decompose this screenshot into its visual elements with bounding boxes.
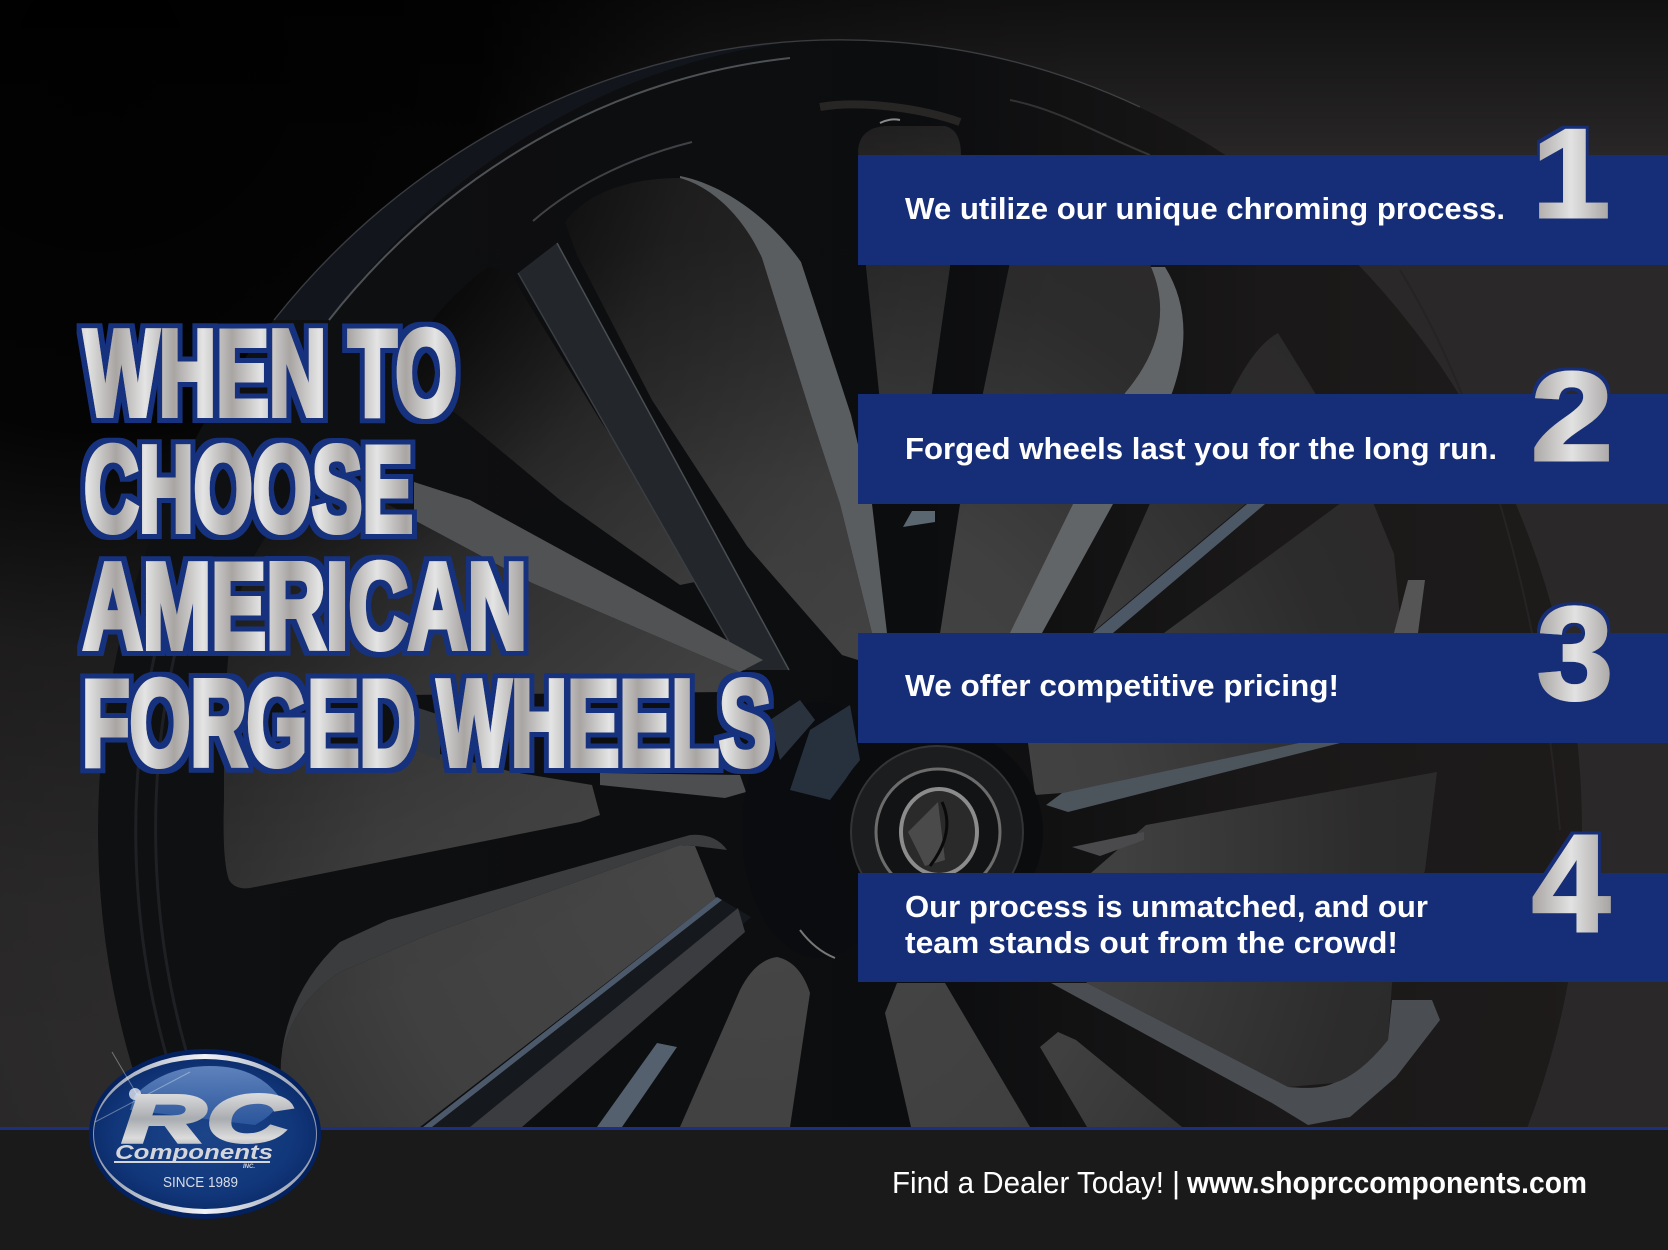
- number 2: 2: [1531, 346, 1613, 487]
- logo Components wordmark: Components: [115, 1142, 273, 1164]
- spike: right of hub: [1072, 832, 1144, 856]
- footer call to action: Find a Dealer Today!: [892, 1165, 1164, 1200]
- panel: reason 3: [858, 633, 1668, 743]
- number 4: 4: [1532, 807, 1610, 961]
- text 4 second line: team stands out from the crowd!: [905, 925, 1398, 960]
- chrome edge: upper centre: [680, 176, 887, 633]
- chrome edge: upper right: [1010, 267, 1183, 633]
- footer call to action: [892, 1165, 1587, 1200]
- logo: RC Components: [89, 1049, 321, 1219]
- logo since 1989: SINCE 1989: [163, 1174, 238, 1191]
- logo inc: INC.: [243, 1164, 255, 1170]
- wheel body with spoke windows: [98, 40, 1582, 1127]
- bar 4: [858, 873, 1668, 982]
- spoke: lower left: [423, 897, 751, 1127]
- chrome band: lower right: [1051, 983, 1440, 1125]
- chrome bit: right rim: [1394, 580, 1425, 633]
- chrome bit: centre spoke: [903, 511, 935, 527]
- text 4: Our process is unmatched, and our: [905, 889, 1428, 924]
- title line 2: CHOOSE: [84, 421, 413, 557]
- spoke: upper centre: [518, 243, 789, 670]
- rim band: [274, 42, 790, 320]
- text 2: Forged wheels last you for the long run.: [905, 431, 1497, 466]
- text 1: We utilize our unique chroming process.: [905, 191, 1505, 226]
- footer call to action: |: [1172, 1165, 1180, 1200]
- footer band: [0, 1127, 1668, 1250]
- blue accent strip: lower spoke: [597, 1043, 677, 1127]
- title line 3: AMERICAN: [83, 538, 527, 674]
- chrome piece beneath title: [600, 773, 746, 798]
- rim highlights: [136, 40, 1560, 1127]
- logo highlight: [130, 1066, 279, 1125]
- blue accent strip: right spoke: [1093, 504, 1265, 633]
- title line 1: WHEN TO: [84, 305, 457, 441]
- chrome edge: lower left spoke: [281, 835, 727, 1060]
- chrome piece between title words: [403, 703, 440, 760]
- panel: reason 4: [858, 873, 1668, 982]
- bar 1: [858, 155, 1668, 265]
- text 3: We offer competitive pricing!: [905, 668, 1339, 703]
- wheel photograph: [98, 40, 1582, 1127]
- chrome accent: lower right spoke: [1046, 743, 1340, 812]
- panel: reason 2: [858, 394, 1668, 504]
- title: [82, 305, 771, 791]
- title line 4: FORGED WHEELS: [82, 655, 771, 791]
- panel: reason 1: [858, 155, 1668, 265]
- logo sparkle: [95, 1052, 190, 1122]
- bar 3: [858, 633, 1668, 743]
- hub body: [742, 700, 1043, 958]
- bar 2: [858, 394, 1668, 504]
- footer call to action: www.shoprccomponents.com: [1186, 1165, 1587, 1200]
- logo underline: [114, 1161, 270, 1163]
- chrome edge: left spoke: [414, 482, 763, 672]
- logo RC letters: RC: [122, 1081, 292, 1157]
- number 3: 3: [1537, 580, 1613, 727]
- number 1: 1: [1532, 103, 1610, 244]
